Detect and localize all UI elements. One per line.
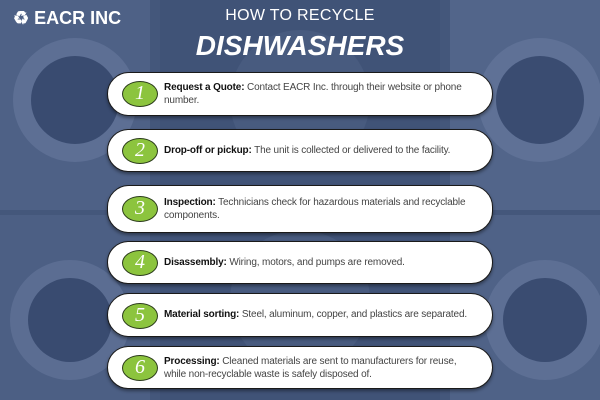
step 1 <box>107 72 493 116</box>
step 6 <box>107 346 493 389</box>
title: HOW TO RECYCLE <box>225 7 375 24</box>
step 3: Inspection: Technicians check for hazardous materials and recyclable components. <box>164 197 465 221</box>
title <box>196 7 404 61</box>
logo: ♻ EACR INC <box>13 8 121 28</box>
step 4 <box>107 241 493 284</box>
step 4: Disassembly: Wiring, motors, and pumps are removed. <box>164 257 405 268</box>
step 1: 1 <box>135 82 145 104</box>
step 4: 4 <box>135 251 145 273</box>
step 5: Material sorting: Steel, aluminum, copper, and plastics are separated. <box>164 309 467 320</box>
step 1: Request a Quote: Contact EACR Inc. through their website or phone number. <box>164 82 462 106</box>
step 2: 2 <box>135 139 145 161</box>
step 5: 5 <box>135 304 145 326</box>
step 3 <box>107 185 493 233</box>
step 3: 3 <box>135 197 145 219</box>
step 2 <box>107 129 493 172</box>
step 2: Drop-off or pickup: The unit is collected or delivered to the facility. <box>164 145 450 156</box>
step 6: Processing: Cleaned materials are sent to manufacturers for reuse, while non-recyclable waste is safely disposed of. <box>164 356 456 380</box>
step 5 <box>107 293 493 337</box>
step 6: 6 <box>135 356 145 378</box>
title: DISHWASHERS <box>196 30 404 61</box>
